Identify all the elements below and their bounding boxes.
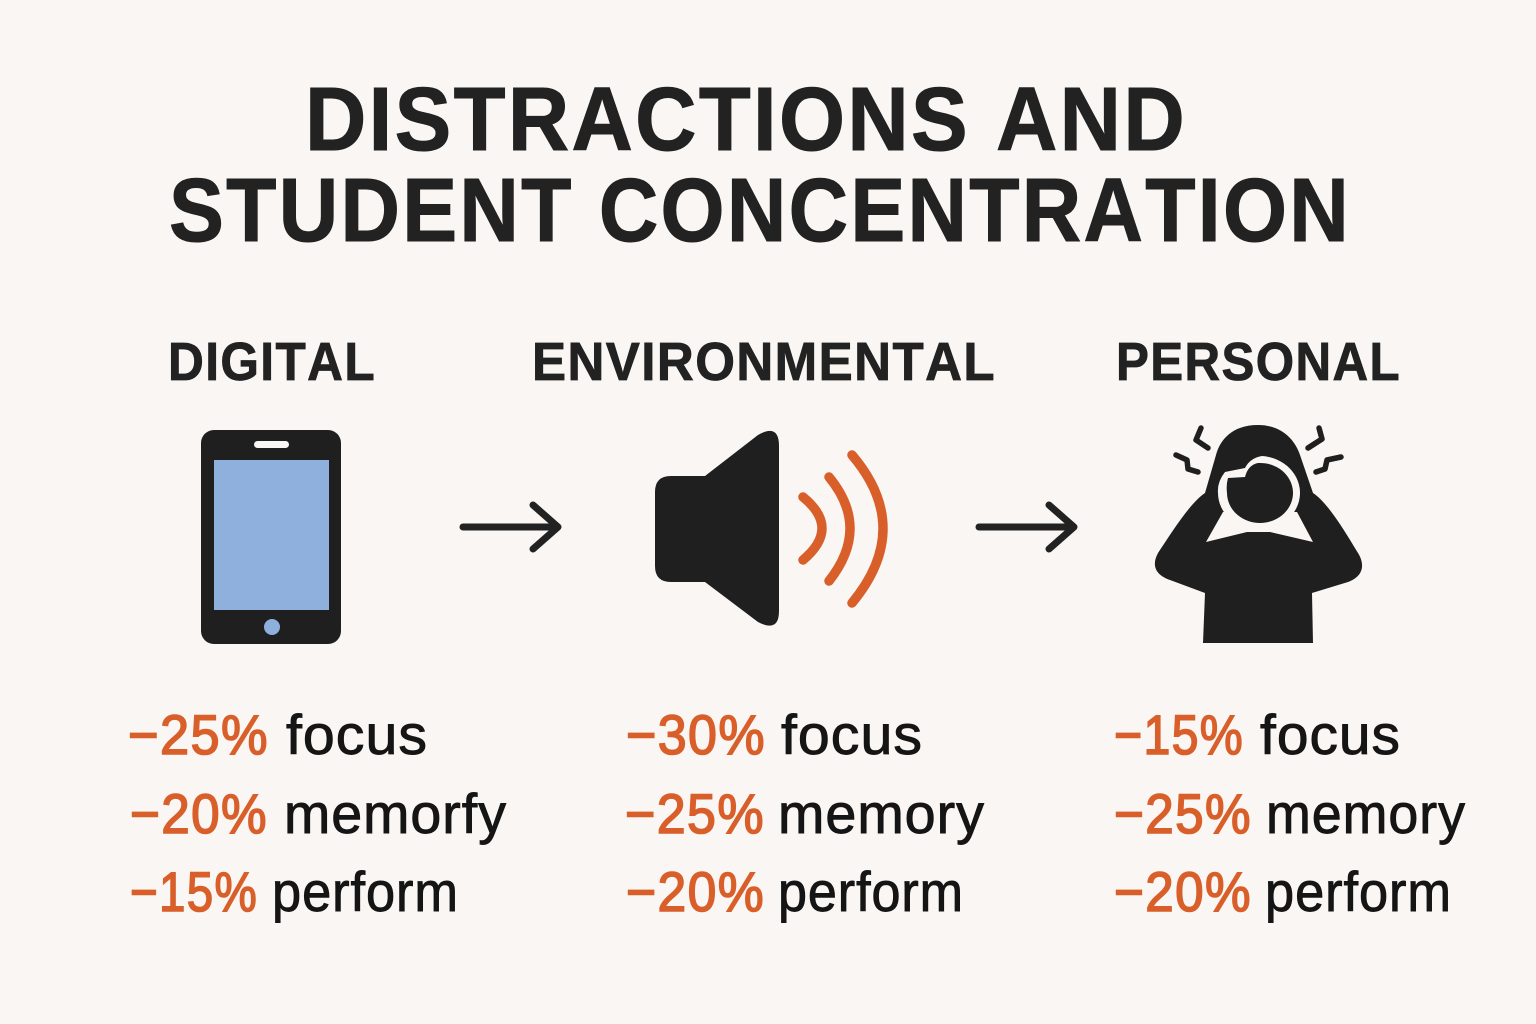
stats: environmental: −25% [625,782,765,845]
stats: personal: −15% [1114,703,1244,766]
stats: environmental: −30% [626,703,766,766]
stats: digital [128,703,507,923]
stats: personal: memory [1266,782,1466,845]
arrow: environmental to personal [979,505,1074,549]
heading: digital: DIGITAL [168,332,376,392]
stats: personal: −25% [1114,782,1252,845]
stats: environmental: perform [778,860,964,923]
stats: personal: −20% [1114,860,1252,923]
stats: digital: −20% [130,782,268,845]
stats: digital: memorfy [284,782,507,845]
stats: environmental: −20% [626,860,765,923]
icon: speaker with sound waves [655,431,883,626]
stats: personal [1114,703,1466,923]
stats: environmental: memory [778,782,985,845]
heading: personal: PERSONAL [1116,332,1401,392]
stats: personal: focus [1260,703,1401,766]
title: STUDENT CONCENTRATION [169,161,1351,261]
stats: digital: perform [272,860,459,923]
stats: environmental: focus [781,703,923,766]
arrow: digital to environmental [463,505,558,549]
heading: environmental: ENVIRONMENTAL [532,332,996,392]
stats: personal: perform [1265,860,1452,923]
stats: digital: −15% [130,860,258,923]
title [169,70,1351,261]
stats: digital: −25% [128,703,269,766]
icon: smartphone [201,430,341,644]
icon: stressed person [1155,425,1362,643]
title: DISTRACTIONS AND [305,70,1187,170]
stats: digital: focus [286,703,428,766]
stats: environmental [625,703,985,923]
